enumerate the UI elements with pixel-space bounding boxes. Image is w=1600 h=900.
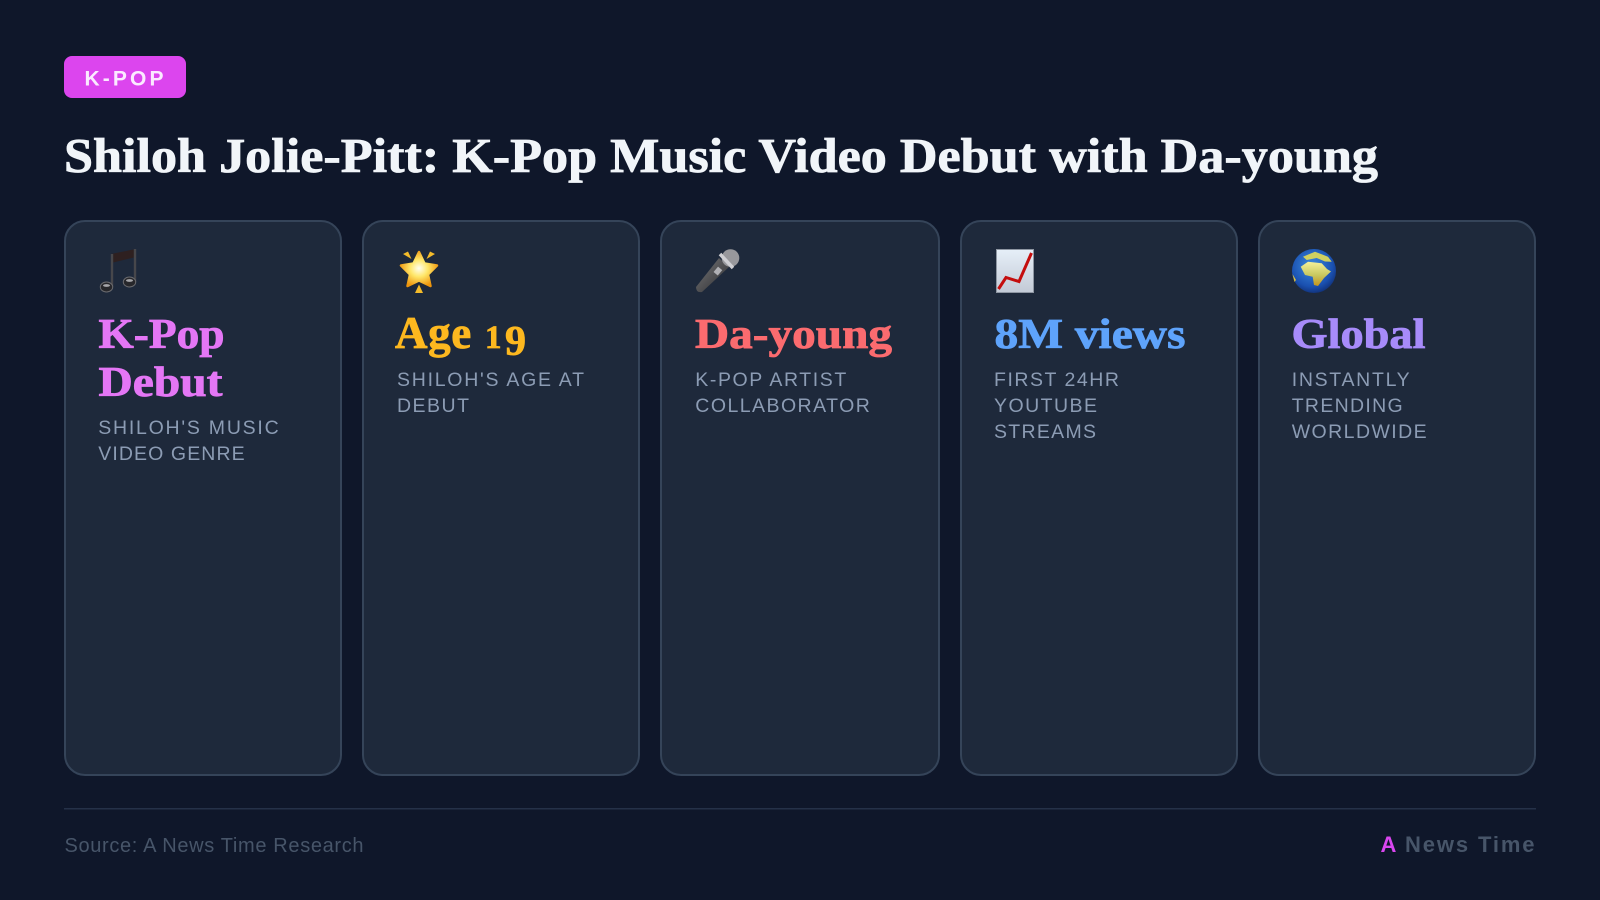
brand mark: News Time bbox=[1405, 832, 1534, 857]
panel: K-Pop Debut bbox=[65, 221, 341, 775]
stat value: Age bbox=[395, 308, 472, 358]
stat label: VIDEO GENRE bbox=[98, 443, 245, 465]
stat value: 1 bbox=[485, 320, 502, 356]
stat value bbox=[98, 312, 224, 406]
stat label: TRENDING bbox=[1292, 395, 1403, 417]
stat value: K-Pop bbox=[98, 312, 224, 358]
icon: rising chart bbox=[996, 250, 1034, 292]
stat label bbox=[695, 369, 870, 417]
icon: musical notes bbox=[100, 249, 136, 292]
stat label bbox=[397, 369, 584, 417]
stat value: Debut bbox=[98, 360, 223, 406]
panel: Da-young bbox=[661, 221, 939, 775]
stat label: DEBUT bbox=[397, 395, 469, 417]
stat label: K-POP ARTIST bbox=[695, 369, 846, 391]
stat label: STREAMS bbox=[994, 421, 1096, 443]
icon: globe bbox=[1292, 249, 1336, 293]
stat label bbox=[994, 369, 1119, 443]
stat label: WORLDWIDE bbox=[1292, 421, 1427, 443]
brand mark: A bbox=[1380, 832, 1396, 857]
category tag: K-POP: K-POP bbox=[84, 68, 164, 90]
panel: 8M views bbox=[961, 221, 1237, 775]
title: Shiloh Jolie-Pitt: K-Pop Music Video Debut with Da-young bbox=[64, 128, 1379, 183]
category tag: K-POP bbox=[64, 56, 186, 98]
stat label: YOUTUBE bbox=[994, 395, 1097, 417]
stat value: Global bbox=[1292, 312, 1426, 358]
stat label: INSTANTLY bbox=[1292, 369, 1410, 391]
stat label bbox=[1292, 369, 1427, 443]
stat label bbox=[98, 417, 279, 465]
icon: microphone bbox=[696, 249, 739, 292]
stat label: SHILOH'S MUSIC bbox=[98, 417, 279, 439]
stat value: Da-young bbox=[695, 312, 892, 358]
stat value: 8M views bbox=[994, 312, 1186, 358]
source note: Source: A News Time Research bbox=[64, 835, 364, 857]
icon: glowing star bbox=[401, 252, 437, 293]
stat value: 9 bbox=[505, 319, 526, 365]
panel: Age 19 bbox=[363, 221, 639, 775]
stat label: SHILOH'S AGE AT bbox=[397, 369, 584, 391]
stat label: FIRST 24HR bbox=[994, 369, 1119, 391]
stat label: COLLABORATOR bbox=[695, 395, 870, 417]
panel: Global bbox=[1259, 221, 1535, 775]
